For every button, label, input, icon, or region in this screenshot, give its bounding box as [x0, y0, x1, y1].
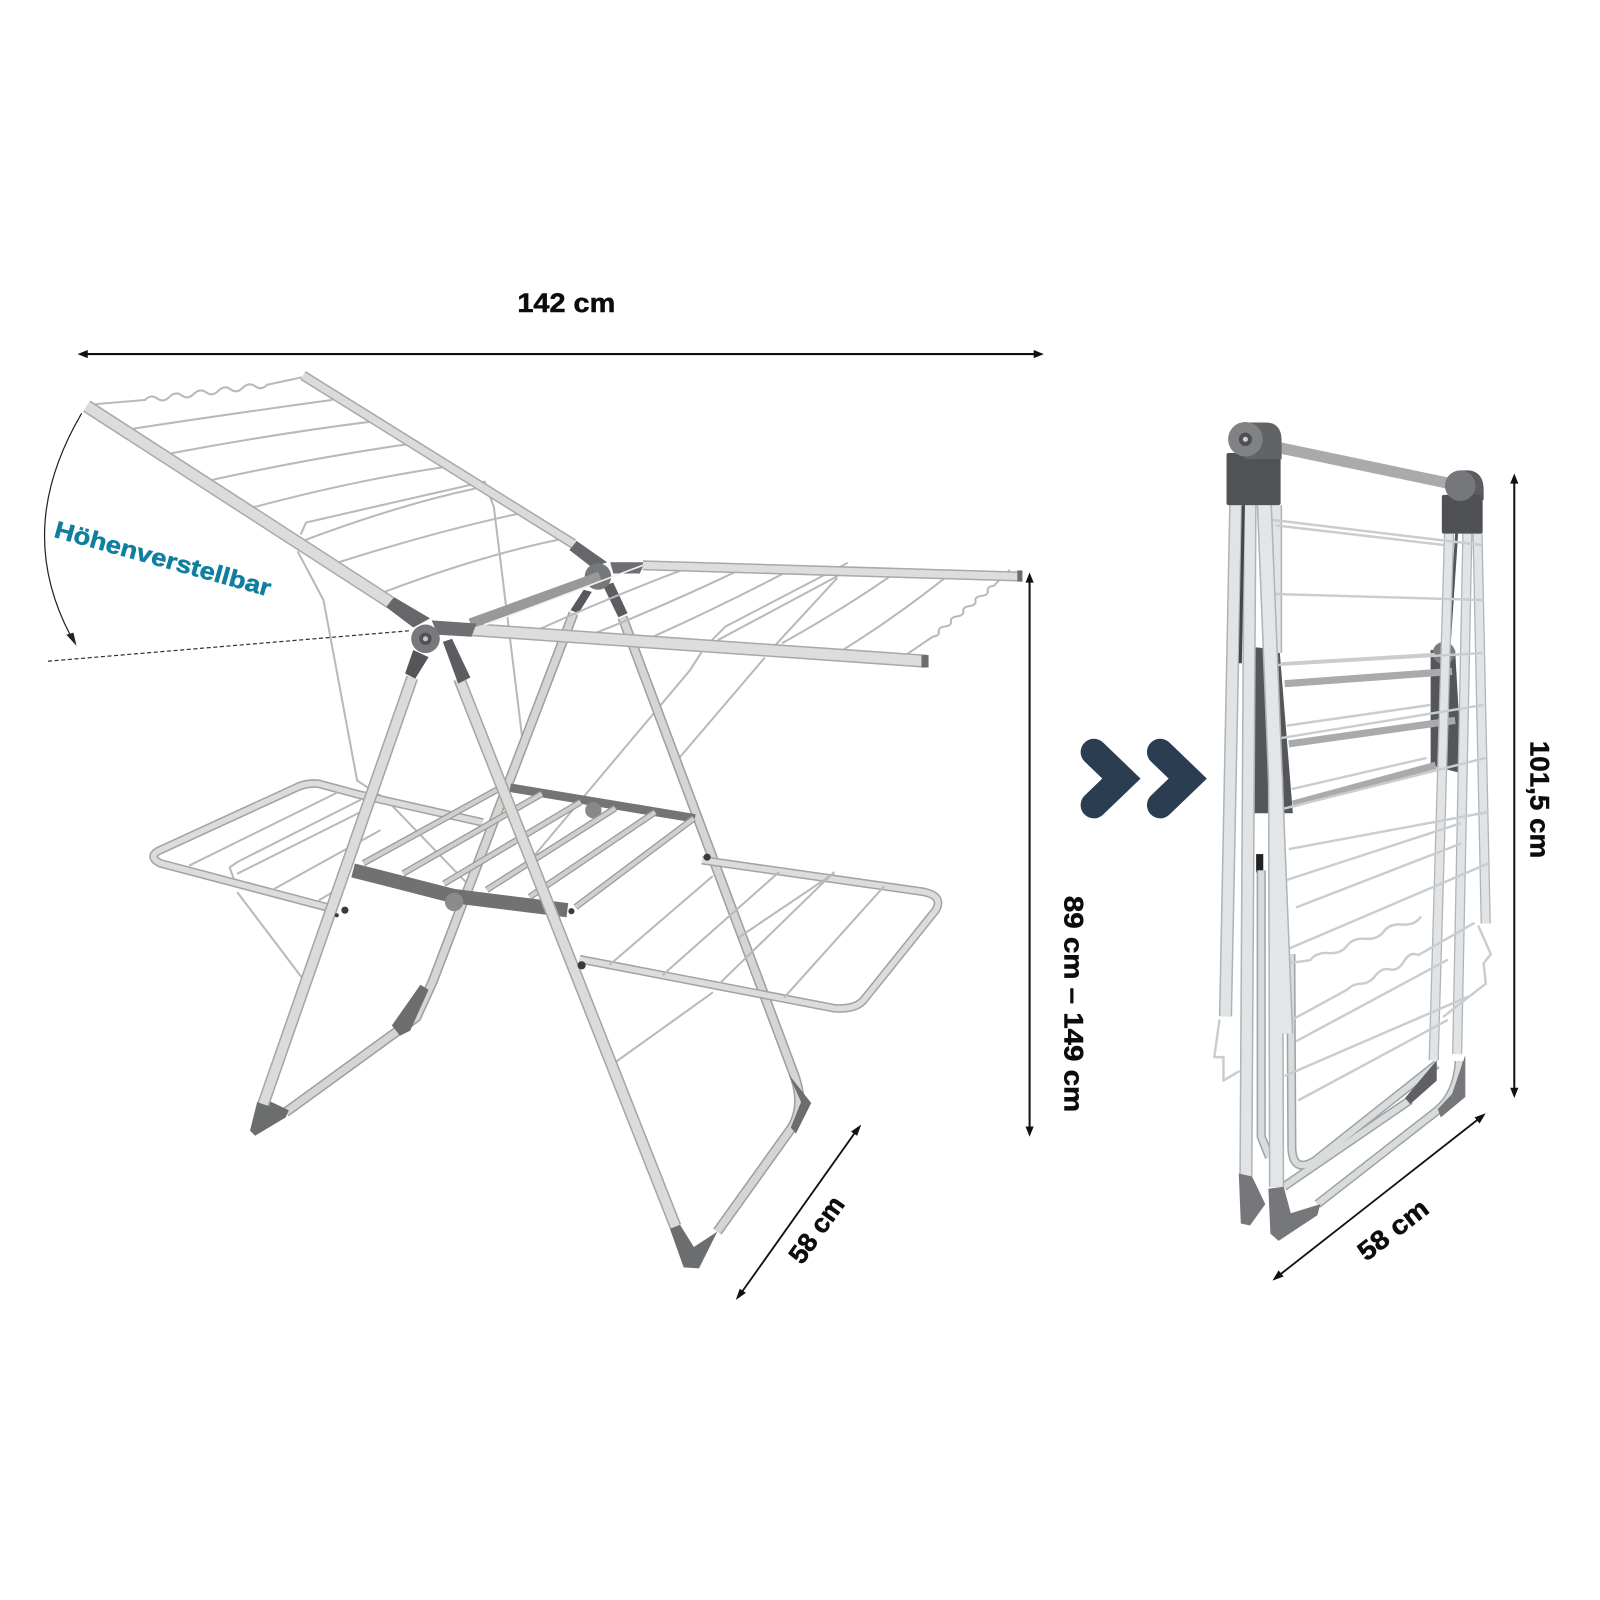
dimension: folded height 101,5 cm: 101,5 cm — [1525, 741, 1555, 858]
right upper wing tubes — [471, 565, 1022, 667]
folded side tubes — [1226, 505, 1486, 1177]
folded top hinge, left — [1227, 422, 1282, 505]
front bar of lower shelf — [353, 870, 567, 911]
front hinge — [386, 597, 477, 684]
folded middle bars — [1285, 671, 1455, 804]
dimension: folded depth 58 cm: 58 cm — [1352, 1193, 1434, 1267]
folded top bar — [1281, 448, 1460, 486]
cross tube between hinges — [470, 577, 600, 623]
height adjustment indicator — [45, 413, 411, 661]
upper left wing tubes — [87, 376, 573, 602]
folded dark plates — [1253, 534, 1462, 872]
unfolded drying rack — [87, 376, 1022, 1268]
dimension: folded height 101,5 cm — [1510, 473, 1555, 1098]
dimension: folded depth 58 cm — [1272, 1113, 1486, 1281]
lower side wings — [154, 784, 938, 1008]
rear hinge — [569, 541, 645, 617]
folded top hinge, right — [1442, 470, 1484, 534]
folded front tubes — [1264, 503, 1286, 1187]
right upper wing wires — [541, 563, 1009, 654]
rear legs — [286, 613, 799, 1232]
dimension: depth 58 cm — [736, 1124, 861, 1300]
dimension: height 89 cm – 149 cm — [1026, 572, 1088, 1137]
folded drying rack — [1214, 422, 1491, 1241]
folded inner frame — [1261, 870, 1459, 1204]
dimension: height 89 cm – 149 cm: 89 cm – 149 cm — [1058, 896, 1088, 1112]
height adjustment indicator: Höhenverstellbar — [51, 516, 274, 602]
leg pegs — [335, 854, 711, 969]
shelf bars — [363, 790, 694, 907]
dimension: total width 142 cm: 142 cm — [517, 288, 615, 318]
dimension: total width 142 cm — [78, 288, 1044, 358]
white wire over cross tube — [484, 565, 643, 626]
lower wing wires — [190, 793, 884, 997]
rear bar of lower shelf — [510, 788, 695, 818]
feet and foot bars — [250, 985, 811, 1268]
dimension: depth 58 cm: 58 cm — [782, 1190, 851, 1269]
icon: double chevron arrow — [1094, 752, 1188, 805]
folded wires — [1214, 519, 1491, 1100]
folded feet — [1239, 1055, 1465, 1241]
front legs — [263, 678, 676, 1227]
support wires behind rack — [230, 482, 764, 1062]
upper left wing wires — [96, 378, 558, 592]
